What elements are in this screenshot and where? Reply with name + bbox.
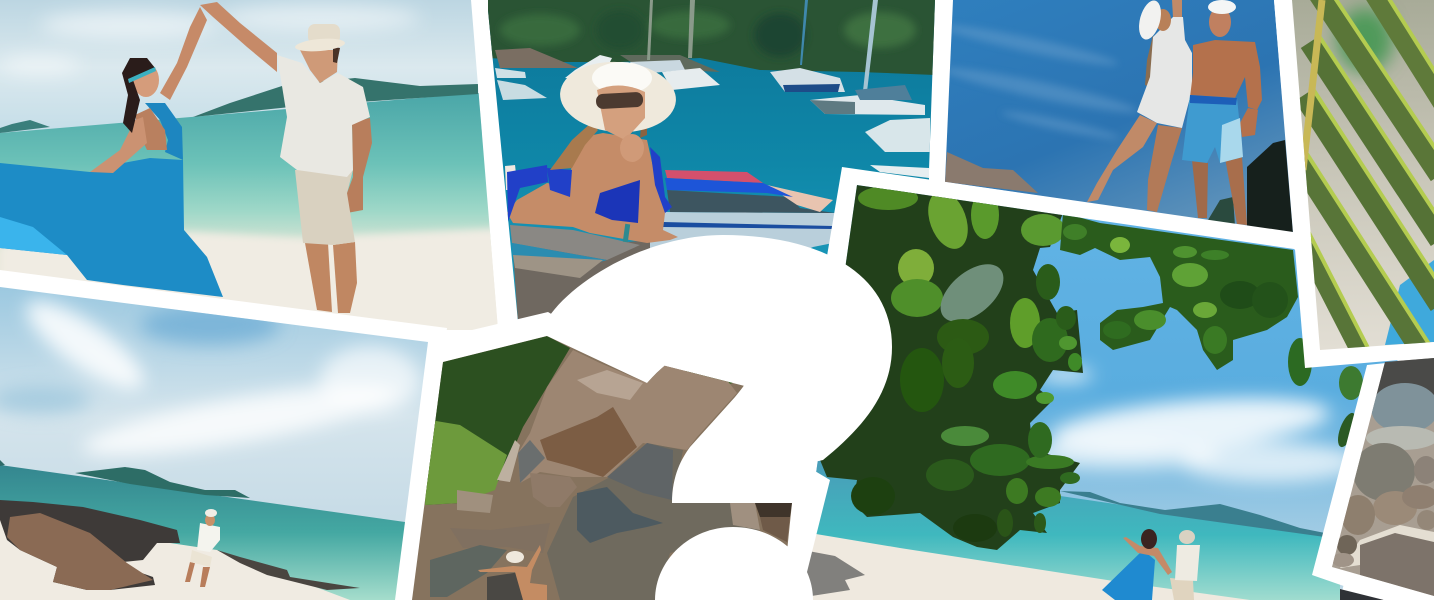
panel: boulders photo	[398, 312, 830, 600]
panel: palm leaves photo	[1274, 0, 1434, 368]
frame	[1274, 0, 1434, 368]
woman	[90, 7, 207, 173]
couple on the beach	[1102, 529, 1200, 600]
panel: woman in hat photo	[488, 0, 938, 330]
foliage: main cluster	[800, 185, 1083, 550]
blue dress	[0, 103, 223, 297]
clouds	[1020, 368, 1360, 482]
panel: wide beach with man photo	[0, 270, 447, 600]
shore rock	[0, 500, 360, 590]
ledge and rocks	[510, 225, 650, 322]
panel: beach dance photo	[0, 0, 510, 340]
couple	[1087, 0, 1262, 225]
boats and masts	[495, 0, 930, 178]
panel: big tree and sea photo	[770, 167, 1410, 600]
panel: small dark photo corner	[1340, 589, 1384, 600]
frame	[0, 270, 447, 600]
boulders	[430, 350, 792, 600]
panel: rocky shore photo	[1312, 355, 1434, 600]
man	[200, 2, 372, 313]
frame	[398, 312, 830, 600]
panel: couple on rock photo	[940, 0, 1300, 240]
sand	[0, 515, 350, 600]
greenery	[425, 336, 752, 505]
woman on rock	[478, 545, 547, 600]
speedboat	[650, 170, 834, 248]
man	[185, 509, 220, 587]
frame	[1312, 358, 1434, 600]
woman in hat	[505, 58, 678, 243]
frame	[775, 167, 1400, 600]
foliage: upper branch	[1060, 213, 1363, 449]
icon: question mark	[547, 235, 892, 600]
